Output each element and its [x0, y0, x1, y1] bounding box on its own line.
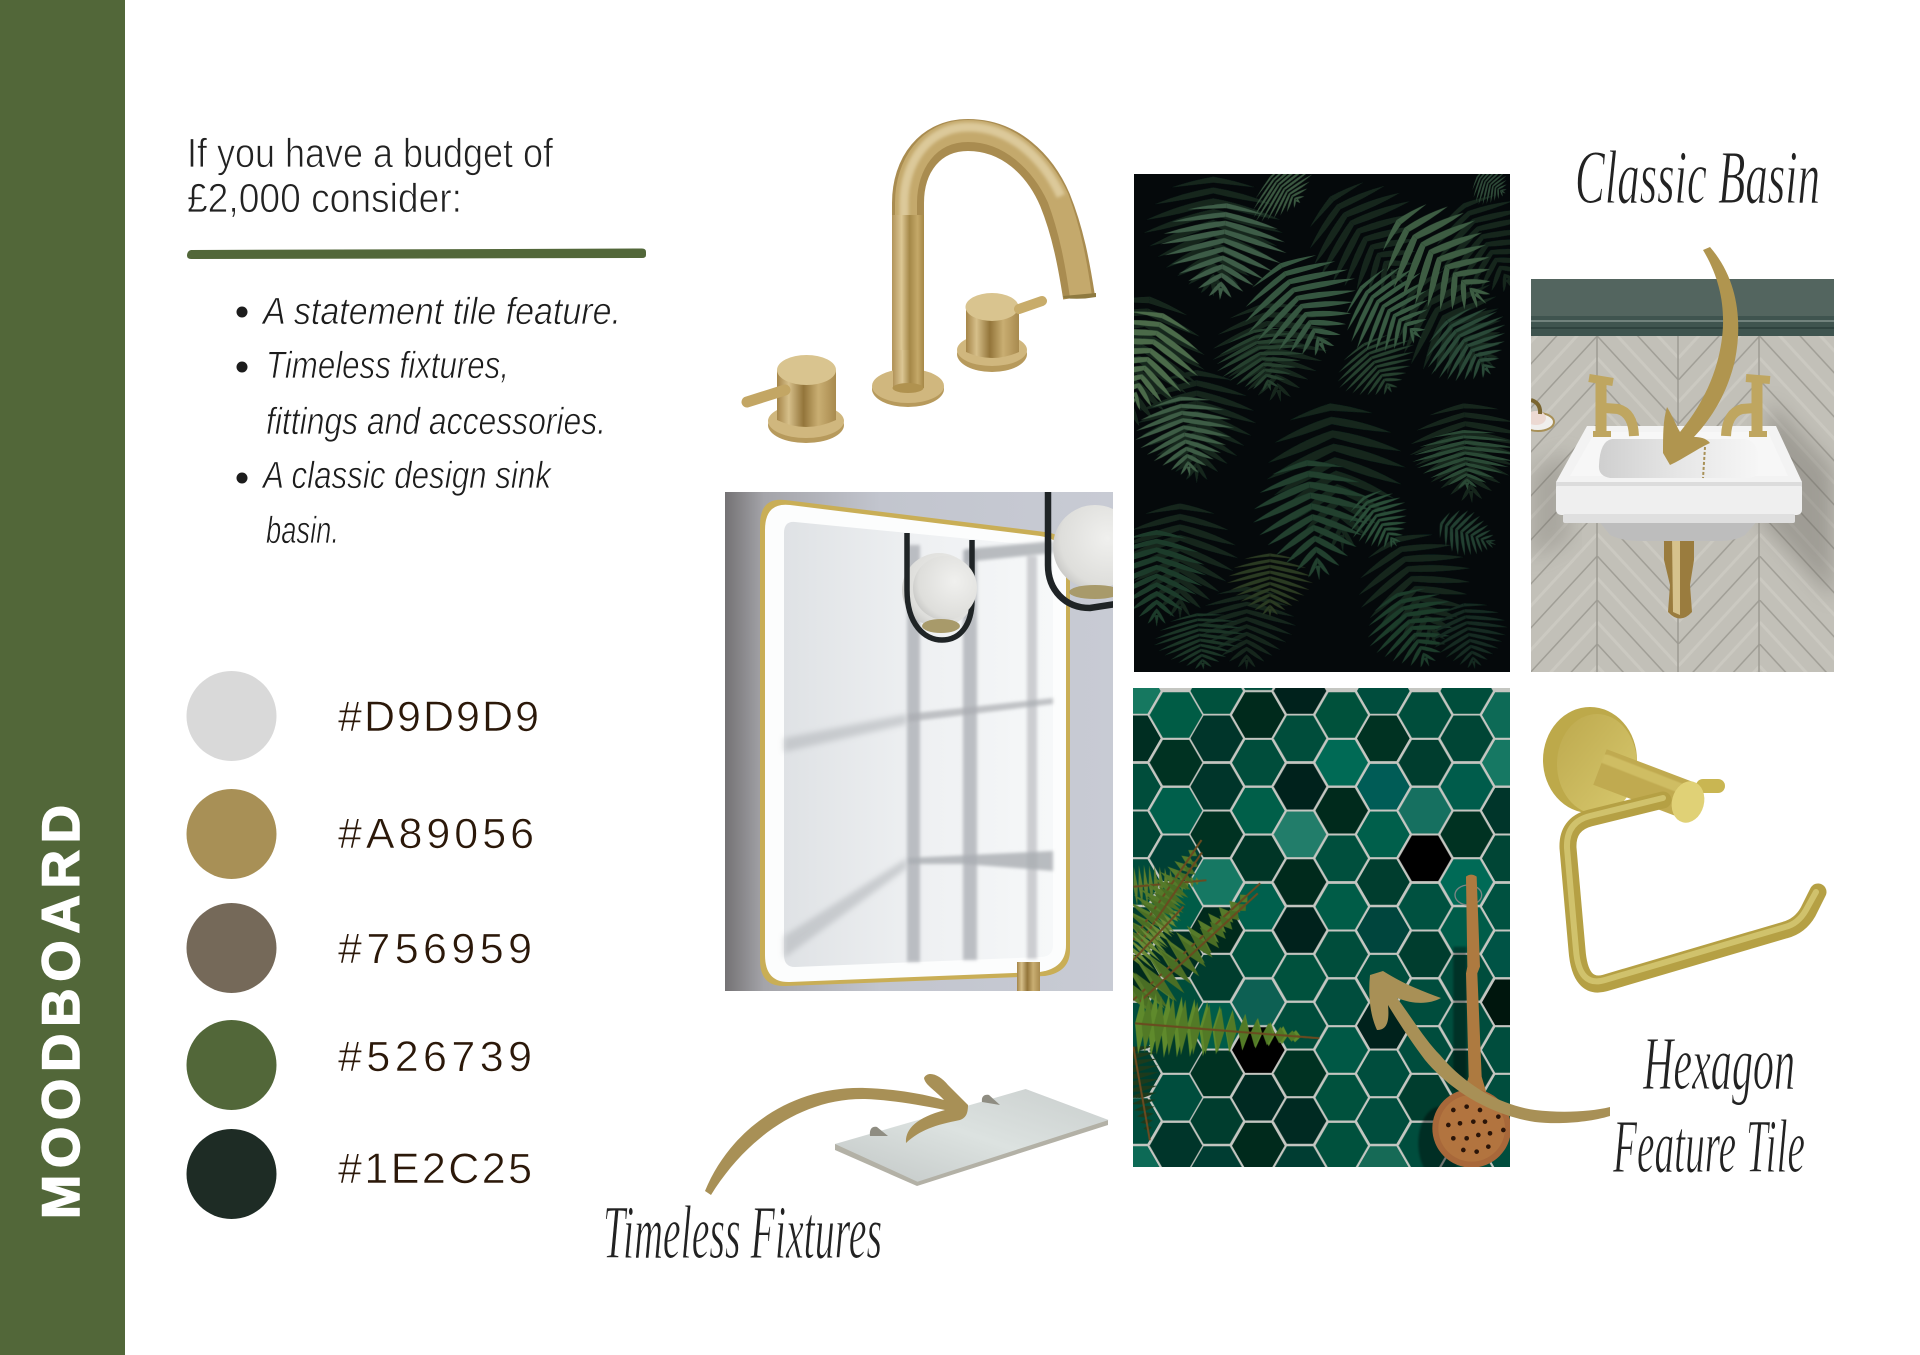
- column joints: [1597, 336, 1759, 672]
- bullet list: fittings and accessories.: [266, 401, 606, 443]
- arrow to shelf: [705, 1074, 968, 1195]
- swatch 756959: [186, 903, 532, 993]
- background fronds: [1134, 176, 1510, 670]
- ladle: [1418, 875, 1511, 1180]
- arrow to hexagon tile: [1369, 971, 1610, 1123]
- left tap: [1589, 378, 1634, 436]
- window reflection: [907, 541, 1053, 962]
- trap: [1664, 535, 1694, 618]
- under bowl: [1606, 523, 1755, 541]
- right tap: [1726, 378, 1770, 436]
- sidebar: [0, 0, 125, 1355]
- swatch 526739: [186, 1020, 532, 1110]
- swatch D9D9D9: [186, 671, 539, 761]
- swatch 756959: #756959: [338, 925, 532, 973]
- bullet list: A statement tile feature.: [261, 291, 621, 333]
- palm leaves photo: [1134, 174, 1510, 672]
- mirror frame: [760, 500, 1070, 986]
- sidebar title: MOODBOARD: [32, 805, 91, 1219]
- hexagon tile photo: [1133, 688, 1510, 1167]
- pendant lamp: [902, 533, 977, 640]
- brass toilet roll holder: [1543, 707, 1818, 984]
- swatch 1E2C25: [186, 1129, 532, 1219]
- bullet list: A classic design sink: [261, 455, 553, 497]
- hexagon tiles: [1133, 688, 1510, 1167]
- budget heading: If you have a budget of: [187, 130, 554, 176]
- caption: hexagon feature tile: [1612, 1022, 1805, 1189]
- caption: timeless fixtures: Timeless Fixtures: [603, 1191, 882, 1275]
- swatch A89056: [186, 789, 534, 879]
- swatch A89056: #A89056: [338, 810, 534, 858]
- bullet list: Timeless fixtures,: [266, 345, 509, 387]
- swatch 1E2C25: #1E2C25: [338, 1145, 532, 1193]
- tap in mirror foot: [1017, 962, 1040, 992]
- basin body: [1556, 426, 1802, 523]
- colour palette: [186, 671, 539, 1219]
- shelf: [835, 1089, 1109, 1186]
- bullet list: [236, 291, 621, 552]
- classic basin photo: [1522, 279, 1834, 672]
- swatch D9D9D9: #D9D9D9: [338, 693, 539, 741]
- mirror photo: [725, 490, 1137, 992]
- budget heading: £2,000 consider:: [187, 175, 462, 221]
- second pendant lamp: [1044, 492, 1113, 612]
- wall shadow: [1760, 400, 1834, 600]
- soap dish: [1531, 398, 1555, 432]
- swatch 526739: #526739: [338, 1033, 532, 1081]
- budget heading: [187, 130, 554, 221]
- fern: [1133, 839, 1320, 1140]
- heading divider: [187, 248, 646, 259]
- mirror glass: [784, 522, 1018, 967]
- caption: hexagon feature tile: Hexagon: [1642, 1022, 1795, 1106]
- bullet list: basin.: [266, 510, 339, 552]
- painted panel and moulding: [1531, 279, 1834, 336]
- brass basin taps: [747, 127, 1096, 443]
- arrow to basin: [1663, 247, 1738, 465]
